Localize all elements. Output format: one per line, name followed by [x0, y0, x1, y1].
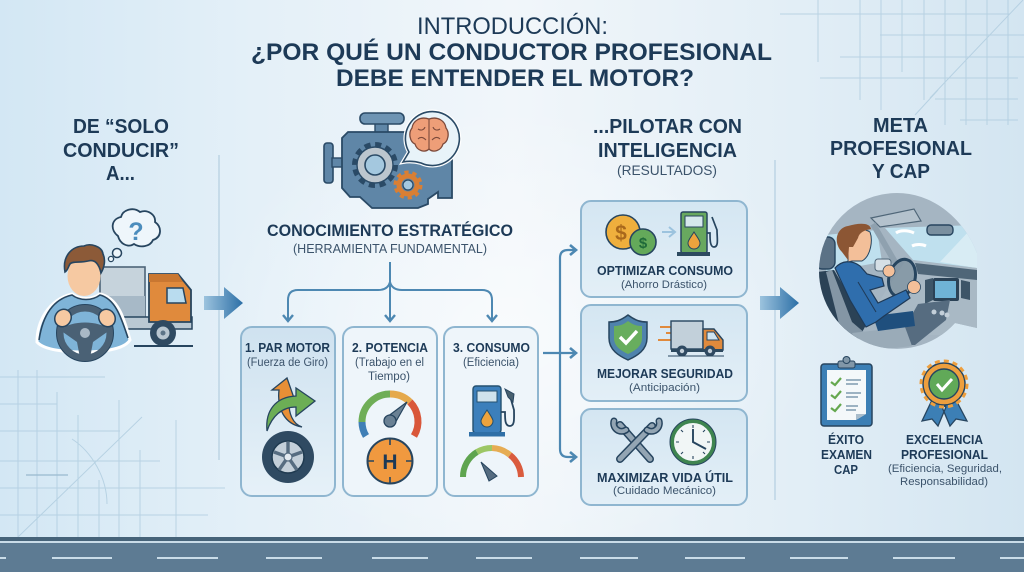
icon: engine with brain	[324, 112, 459, 208]
heading: pilotar con inteligencia: INTELIGENCIA	[598, 140, 737, 162]
subtitle: (Ahorro Drástico)	[621, 279, 707, 291]
text: excelencia profesional	[888, 432, 1002, 488]
heading: conocimiento estratégico	[267, 221, 513, 256]
icon: coins: $	[639, 235, 648, 252]
heading: conocimiento estratégico: CONOCIMIENTO ESTRATÉGICO	[267, 221, 513, 240]
icon: large gear	[355, 145, 395, 185]
icon: moving truck	[658, 321, 724, 356]
heading: meta profesional y cap: PROFESIONAL	[830, 138, 972, 160]
text: excelencia profesional: EXCELENCIA	[906, 432, 984, 447]
icon: speedometer	[362, 394, 418, 436]
subtitle: (Eficiencia)	[463, 357, 519, 369]
heading: meta profesional y cap: META	[873, 115, 928, 137]
icon: thought bubble: ?	[128, 218, 144, 246]
text: éxito examen cap	[821, 432, 872, 477]
panel: mejorar seguridad	[581, 305, 747, 401]
icon: power H dial	[368, 438, 412, 484]
icon: shield	[609, 315, 647, 360]
panel: consumo	[444, 327, 538, 496]
illustration: driver in car cabin	[815, 190, 980, 355]
icon: tire	[262, 431, 314, 483]
title: ¿POR QUÉ UN CONDUCTOR PROFESIONAL	[251, 38, 772, 66]
text: éxito examen cap: EXAMEN	[821, 447, 872, 462]
icon: thought bubble	[108, 209, 160, 262]
text: excelencia profesional: (Eficiencia, Seguridad,	[888, 463, 1002, 475]
arrows: bracket to three cards	[283, 262, 497, 321]
icon: green fuel pump	[677, 212, 717, 256]
icon: coins	[606, 215, 656, 255]
arrow: left to center	[204, 287, 243, 319]
icon: crossed wrenches	[614, 421, 659, 459]
icon: torque arrows	[267, 378, 315, 431]
icon: fuel pump	[469, 386, 514, 436]
title	[251, 13, 772, 92]
heading: MAXIMIZAR VIDA ÚTIL	[597, 470, 733, 485]
icon: truck	[100, 267, 193, 346]
arrow	[662, 227, 675, 237]
text: excelencia profesional: Responsabilidad)	[900, 476, 988, 488]
heading: meta profesional y cap: Y CAP	[872, 161, 930, 183]
text: éxito examen cap: CAP	[834, 462, 858, 477]
icon: driver	[37, 245, 130, 362]
subtitle: (Trabajo en el	[355, 357, 424, 369]
heading: pilotar con inteligencia: (RESULTADOS)	[617, 162, 717, 178]
heading: pilotar con inteligencia: ...PILOTAR CON	[593, 116, 742, 138]
icon: small gear	[396, 173, 420, 197]
heading: pilotar con inteligencia	[593, 116, 742, 178]
heading: 3. CONSUMO	[453, 340, 530, 355]
icon: exam clipboard	[821, 356, 872, 426]
heading: 2. POTENCIA	[352, 340, 429, 355]
icon: coins: $	[615, 222, 627, 245]
panel: potencia	[343, 327, 437, 496]
subtitle: (Anticipación)	[629, 382, 700, 394]
heading: 1. PAR MOTOR	[245, 340, 331, 355]
title: INTRODUCCIÓN:	[417, 13, 608, 40]
subtitle: (Fuerza de Giro)	[247, 357, 328, 369]
road	[0, 537, 1024, 572]
heading: de solo conducir	[63, 116, 179, 185]
icon: power H dial: H	[382, 451, 398, 474]
icon: brain bubble	[403, 112, 459, 166]
icon: excellence rosette	[921, 361, 967, 426]
icon: efficiency gauge	[463, 448, 521, 481]
icon: clock	[670, 419, 716, 465]
heading: conocimiento estratégico: (HERRAMIENTA FUNDAMENTAL)	[293, 241, 487, 256]
subtitle: (Cuidado Mecánico)	[613, 485, 716, 497]
heading: de solo conducir: A...	[106, 163, 135, 185]
icon: driver with truck and question bubble	[37, 209, 193, 362]
panel: par motor	[241, 327, 335, 496]
heading: meta profesional y cap	[830, 115, 972, 183]
panel: optimizar consumo	[581, 201, 747, 297]
text: éxito examen cap: ÉXITO	[828, 432, 864, 447]
panel: maximizar vida útil	[581, 409, 747, 505]
heading: de solo conducir: DE “SOLO	[73, 116, 169, 138]
heading: OPTIMIZAR CONSUMO	[597, 264, 733, 278]
arrow: center to right	[760, 287, 799, 319]
heading: de solo conducir: CONDUCIR”	[63, 140, 179, 162]
panel: potencia: Tiempo)	[368, 371, 410, 383]
arrows: cards to results	[543, 245, 576, 462]
title: DEBE ENTENDER EL MOTOR?	[336, 65, 694, 92]
heading: MEJORAR SEGURIDAD	[597, 367, 733, 381]
text: excelencia profesional: PROFESIONAL	[901, 447, 988, 462]
